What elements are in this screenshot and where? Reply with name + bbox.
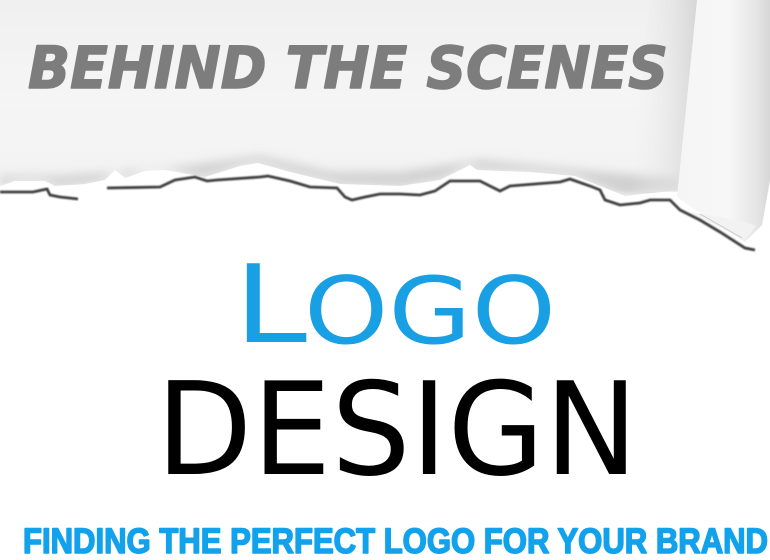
- title: logo: [234, 243, 556, 368]
- heading: behind the scenes: BEHIND THE SCENES: [28, 34, 668, 102]
- paper sheet: [0, 0, 700, 195]
- title: logo: L: [234, 243, 307, 368]
- title: logo: OGO: [304, 257, 556, 365]
- white torn margin: [0, 163, 680, 210]
- tear edge line: [0, 176, 755, 250]
- title: design: DESIGN: [156, 356, 638, 505]
- fold shadow next to curl: [630, 0, 700, 192]
- panel: torn paper header: [0, 0, 770, 250]
- tear shadow band: [0, 156, 680, 196]
- page curl: [677, 0, 770, 242]
